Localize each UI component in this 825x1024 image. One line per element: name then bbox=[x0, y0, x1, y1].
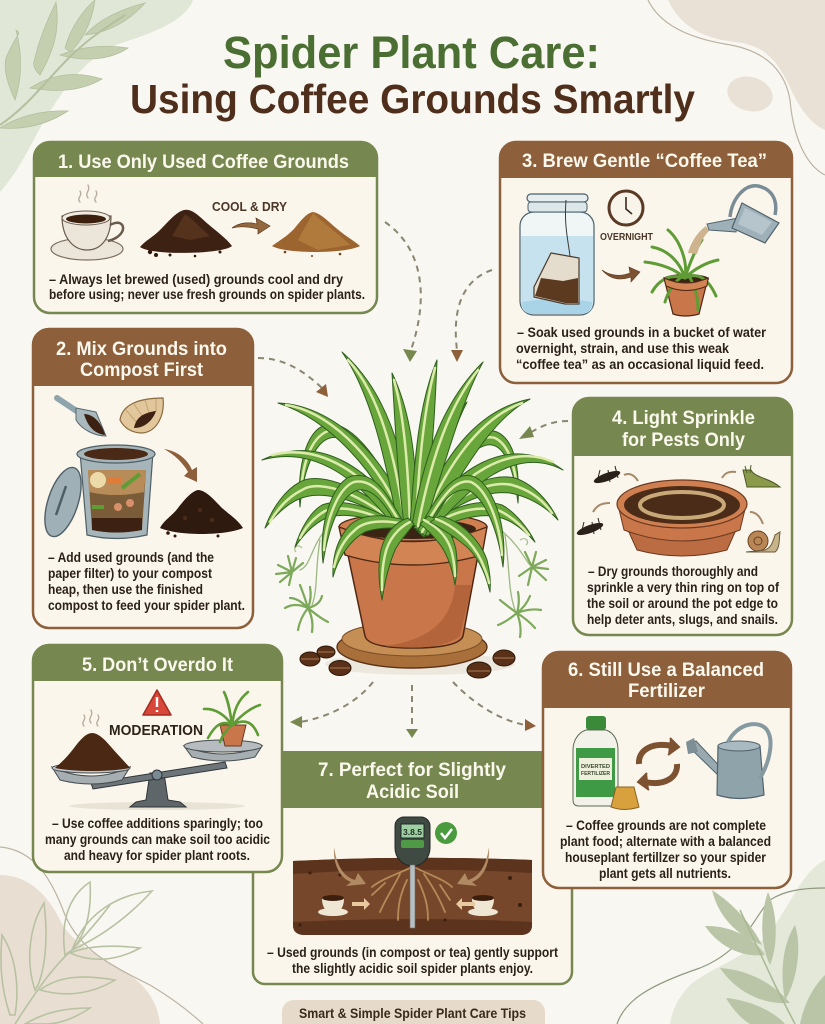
arrow: tea to plant bbox=[602, 267, 640, 282]
icon: jar with tea bag bbox=[520, 194, 594, 315]
panel 1 body text bbox=[49, 272, 365, 302]
panel 7 body text: – Used grounds (in compost or tea) gently support bbox=[267, 945, 558, 960]
title: Using Coffee Grounds Smartly bbox=[130, 76, 695, 122]
arrow: plant to panel 6 bbox=[453, 682, 536, 731]
panel 4 body text: the soil or around the pot edge to bbox=[587, 596, 778, 611]
panel 2 header: 2. Mix Grounds into bbox=[56, 339, 227, 360]
panel 6 body text bbox=[560, 818, 771, 881]
panel 7 body text bbox=[267, 945, 558, 976]
saucer bbox=[337, 622, 487, 668]
panel 5 body text bbox=[45, 816, 270, 863]
panel 5 body text: many grounds can make soil too acidic bbox=[45, 832, 270, 847]
background decoration: top-left foliage bbox=[0, 0, 193, 192]
label: cool and dry: COOL & DRY bbox=[212, 199, 287, 214]
icon: scoop bbox=[57, 398, 106, 436]
terracotta pot body bbox=[339, 513, 487, 648]
panel 7: slightly acidic soil bbox=[253, 751, 572, 984]
panel 4 body text: – Dry grounds thoroughly and bbox=[588, 564, 758, 579]
terracotta pot front rim bbox=[339, 527, 487, 565]
icon: orange cap bbox=[611, 787, 639, 810]
icon: fertilizer bottle bbox=[573, 716, 618, 806]
background decoration: bottom-right foliage bbox=[617, 860, 825, 1024]
panel 3 header bbox=[499, 142, 793, 178]
icon: soil pH meter: 3.8.5 bbox=[403, 828, 423, 837]
footer banner: Smart & Simple Spider Plant Care Tips bbox=[299, 1005, 526, 1021]
panel 5 header bbox=[32, 645, 283, 681]
plant shadow bbox=[325, 653, 515, 675]
panel 2 header bbox=[32, 329, 254, 386]
label: overnight: OVERNIGHT bbox=[600, 232, 653, 243]
panel 7 header: Acidic Soil bbox=[366, 782, 459, 803]
central spider plant in pot bbox=[262, 352, 563, 678]
icon: fertilizer bottle: DIVERTED bbox=[581, 764, 610, 770]
arrow: bin to compost bbox=[164, 449, 197, 482]
panel 4 body text bbox=[587, 564, 779, 627]
panel 1 body text: before using; never use fresh grounds on spider plants. bbox=[49, 287, 365, 302]
icon: ants, slug and snail bbox=[575, 465, 780, 552]
panel 3: brew gentle coffee tea bbox=[499, 142, 793, 383]
icon: grounds on scale bbox=[55, 710, 130, 771]
footer banner bbox=[282, 1000, 545, 1024]
panel 1: use only used coffee grounds bbox=[33, 142, 378, 313]
arrow: plant to panel 7 bbox=[406, 685, 418, 738]
panel 3 body text: – Soak used grounds in a bucket of water bbox=[517, 325, 767, 340]
icon: small spider plant bbox=[645, 230, 718, 316]
icon: watering can bbox=[686, 724, 771, 798]
panel 6 body text: plant food; alternate with a balanced bbox=[560, 834, 771, 849]
panel 4 header: 4. Light Sprinkle bbox=[612, 408, 755, 429]
panel 4: light sprinkle for pests bbox=[572, 398, 793, 635]
panel 6 header: Fertilizer bbox=[628, 681, 706, 702]
panel 5 body text: and heavy for spider plant roots. bbox=[64, 848, 250, 863]
icon: fertilizer bottle: FERTILIZER bbox=[581, 771, 610, 777]
panel 4 body text: help deter ants, slugs, and snails. bbox=[587, 612, 778, 627]
icon: clock bbox=[609, 191, 643, 225]
panel 3 body text: overnight, strain, and use this weak bbox=[516, 341, 729, 356]
panel 7 header: 7. Perfect for Slightly bbox=[318, 760, 506, 781]
panel 6 header bbox=[542, 652, 792, 708]
title bbox=[130, 27, 695, 122]
arrow: panel 1 to plant bbox=[385, 222, 421, 362]
arrows: downward into soil bbox=[334, 847, 489, 886]
icon: dried grounds pile bbox=[272, 212, 360, 257]
icon: paper filter bbox=[120, 398, 163, 433]
icon: watering can pouring bbox=[688, 186, 779, 254]
panel 2 body text bbox=[48, 550, 245, 613]
arrow: dark to dry grounds bbox=[232, 218, 270, 234]
icon: soil cross-section bbox=[293, 858, 532, 935]
arrow: panel 2 to plant bbox=[258, 358, 328, 397]
panel 7 header bbox=[270, 751, 553, 808]
panel 6 body text: – Coffee grounds are not complete bbox=[566, 818, 766, 833]
icon: soil pH meter bbox=[395, 817, 430, 928]
background decoration: bottom-left foliage bbox=[0, 847, 203, 1024]
panel 1 header bbox=[33, 142, 378, 177]
panel 4 header: for Pests Only bbox=[622, 430, 745, 451]
icon: coffee cup bbox=[51, 185, 123, 260]
arrow: plant to panel 5 bbox=[290, 682, 373, 728]
panel 5: don't overdo it bbox=[32, 645, 283, 872]
icon: pot with coffee ring bbox=[617, 480, 747, 556]
front leaves bbox=[322, 475, 504, 600]
icon: green check bbox=[435, 822, 457, 844]
icons: small coffee cups bbox=[318, 895, 498, 916]
panel 3 header: 3. Brew Gentle “Coffee Tea” bbox=[522, 151, 767, 172]
panel 6 body text: plant gets all nutrients. bbox=[599, 866, 731, 881]
panel 5 body text: – Use coffee additions sparingly; too bbox=[52, 816, 263, 831]
icon: warning triangle bbox=[143, 690, 171, 715]
icon: compost bin bbox=[77, 445, 155, 538]
panel 2 header: Compost First bbox=[80, 360, 204, 381]
panel 3 body text: “coffee tea” as an occasional liquid feed. bbox=[516, 357, 764, 372]
panel 2 body text: heap, then use the finished bbox=[48, 582, 203, 597]
icon: finished compost pile bbox=[160, 490, 243, 538]
panel 6 header: 6. Still Use a Balanced bbox=[568, 660, 764, 681]
icon: roots bbox=[372, 868, 452, 920]
icon: small plant on scale bbox=[204, 692, 260, 746]
stolons with plantlets bbox=[276, 525, 548, 637]
panel 2: mix grounds into compost bbox=[32, 329, 254, 628]
icon: used grounds pile bbox=[140, 210, 232, 257]
icon: bin lid bbox=[38, 463, 88, 541]
panel 7 body text: the slightly acidic soil spider plants enjoy. bbox=[292, 961, 533, 976]
label: moderation: MODERATION bbox=[109, 723, 203, 739]
arrows: horizontal toward roots bbox=[352, 898, 475, 910]
arrow: panel 4 to plant bbox=[519, 421, 568, 439]
panel 6: balanced fertilizer bbox=[542, 652, 792, 888]
panel 2 body text: compost to feed your spider plant. bbox=[48, 598, 245, 613]
back leaves bbox=[262, 352, 563, 547]
panel 6 body text: houseplant fertillzer so your spider bbox=[565, 850, 767, 865]
arrow: panel 3 to plant bbox=[451, 270, 492, 362]
panel 1 body text: – Always let brewed (used) grounds cool and dry bbox=[49, 272, 343, 287]
panel 2 body text: paper filter) to your compost bbox=[48, 566, 212, 581]
coffee beans bbox=[300, 646, 515, 678]
icon: balance scale bbox=[52, 740, 262, 810]
icon: alternate cycle arrows bbox=[638, 738, 679, 790]
background decoration: top-right blob bbox=[648, 0, 825, 175]
panel 5 header: 5. Don’t Overdo It bbox=[82, 655, 234, 676]
panel 1 header: 1. Use Only Used Coffee Grounds bbox=[58, 152, 349, 173]
panel 3 body text bbox=[516, 325, 767, 372]
panel 4 header bbox=[572, 398, 793, 456]
title: Spider Plant Care: bbox=[223, 27, 600, 78]
panel 4 body text: sprinkle a very thin ring on top of bbox=[587, 580, 779, 595]
panel 2 body text: – Add used grounds (and the bbox=[48, 550, 214, 565]
